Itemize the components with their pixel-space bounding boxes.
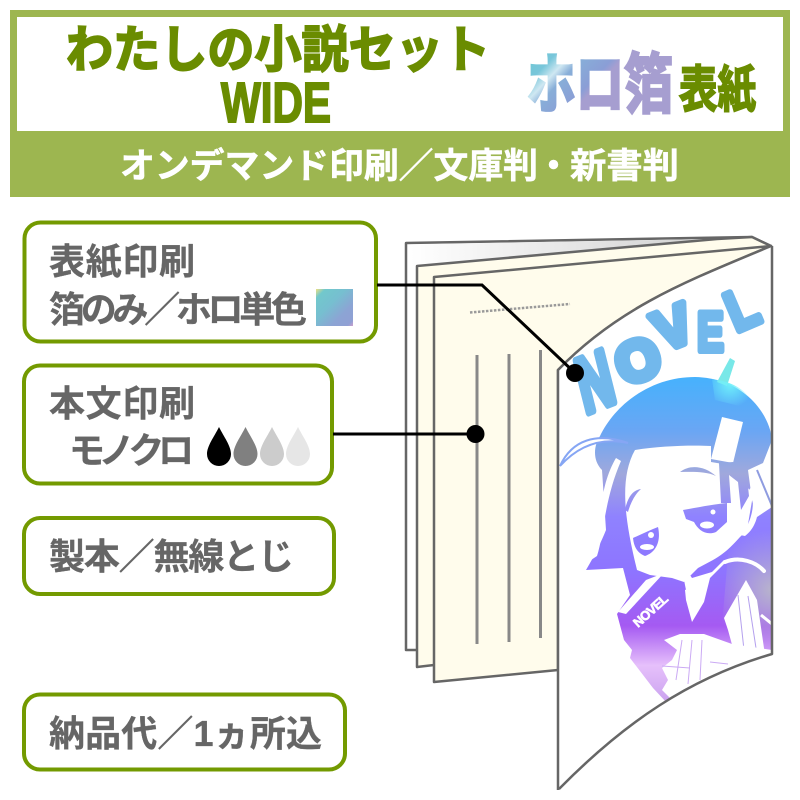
arrow: body callout (333, 425, 484, 443)
cover (558, 246, 772, 789)
cover outline (558, 246, 772, 790)
text: binding: 製本／無線とじ (49, 536, 294, 577)
scarf line (725, 560, 764, 571)
side hair (592, 458, 621, 560)
header banner (10, 10, 790, 197)
icon: ink drops (207, 427, 310, 466)
heading: cover printing: 表紙印刷 (49, 241, 195, 282)
icon: holo swatch (316, 289, 353, 326)
title: わたしの小説セット (66, 22, 490, 78)
mouth and collar (684, 560, 724, 590)
panel: body printing (24, 366, 332, 484)
text: monochrome: モノクロ (69, 430, 194, 471)
title: WIDE: WIDE (221, 71, 331, 135)
NOVEL lettering: L (717, 275, 768, 344)
character silhouette (586, 377, 772, 703)
brows and eyes (625, 467, 727, 556)
subtitle: ・ (536, 147, 571, 186)
ear and right hair (719, 462, 749, 510)
panel: binding (24, 518, 334, 594)
sleeve (724, 580, 765, 655)
panel: cover printing (24, 222, 376, 342)
header dotted line (470, 304, 570, 312)
foil logo: ホロ箔 (527, 50, 673, 122)
hair strand (560, 438, 628, 466)
book title: NOVEL (630, 591, 671, 630)
middle page (417, 237, 771, 667)
back page (406, 237, 771, 650)
book pages (618, 576, 661, 614)
NOVEL lettering: N (568, 332, 622, 430)
heading: body printing: 本文印刷 (49, 383, 195, 424)
panel: delivery (24, 694, 345, 770)
arrow: cover callout (377, 285, 584, 382)
NOVEL lettering: E (697, 302, 724, 364)
text lines (477, 350, 540, 644)
NOVEL lettering: V (644, 291, 702, 363)
NOVEL lettering (572, 289, 764, 417)
subtitle: オンデマンド印刷／文庫判 (120, 146, 538, 186)
cover artwork (560, 275, 772, 703)
text: foil only: 箔のみ／ホロ単色 (49, 289, 307, 330)
NOVEL lettering: O (607, 323, 669, 397)
face (625, 446, 753, 582)
clip (711, 417, 743, 463)
right hair strand (757, 470, 772, 506)
cover label: 表紙 (679, 63, 756, 118)
subtitle: 新書判 (570, 147, 679, 186)
front page (434, 246, 771, 682)
beret stem (717, 358, 735, 386)
text: delivery: 納品代／1ヵ所込 (49, 713, 322, 754)
book illustration (406, 237, 772, 790)
hand (662, 634, 772, 700)
